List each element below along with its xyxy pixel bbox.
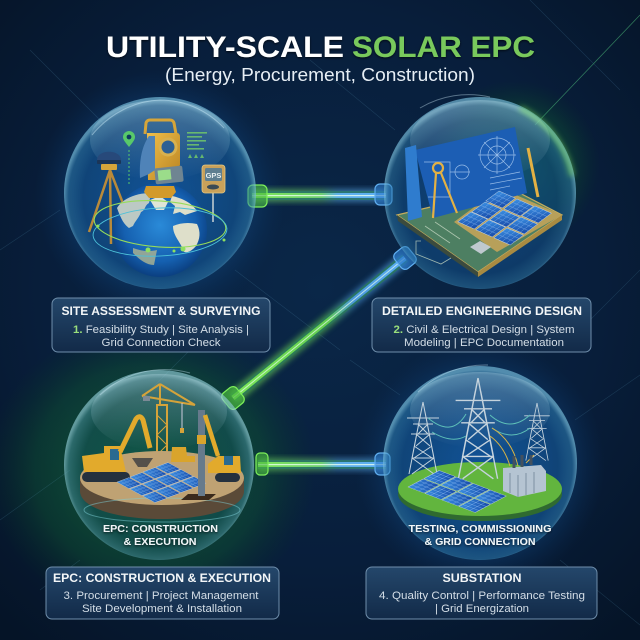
panel: step 2 label: 2. Civil & Electrical Design | System (394, 324, 574, 336)
connector: step 1 to step 2 (248, 184, 392, 207)
panel: step 3 label: EPC: CONSTRUCTION & EXECUTION (53, 571, 271, 585)
icon: pylons and wires (407, 378, 550, 479)
panel: step 2 bubble (384, 95, 576, 289)
connector: step 2 to step 3 (220, 245, 418, 411)
icon: location pin (123, 131, 135, 185)
icon: transformer module (470, 241, 491, 254)
panel: step 1 label: Grid Connection Check (102, 337, 221, 349)
icon: right excavator (205, 415, 241, 482)
panel: step 4 bubble (383, 365, 577, 560)
panel: step 4 label: | Grid Energization (435, 603, 529, 615)
panel: step 2 label (372, 298, 591, 352)
icon: orbit rings (92, 196, 228, 259)
icon: globe (113, 183, 207, 277)
panel: step 3 bubble (64, 370, 254, 560)
panel: step 4 label: SUBSTATION (442, 571, 522, 585)
icon: pencil (528, 148, 538, 197)
panel: step 3 label (46, 567, 279, 619)
icon: engineering board (397, 188, 562, 272)
connector: step 3 to step 4 (256, 453, 390, 475)
panel: step 1 label: 1. Feasibility Study | Site Analysis | (73, 324, 249, 336)
icon: GPS unit: GPS (206, 171, 221, 180)
panel: step 4 label (366, 567, 597, 619)
icon: solar panel array (458, 191, 551, 245)
icon: tripod receiver (89, 152, 131, 244)
panel: step 4 label: 4. Quality Control | Performance Testing (379, 590, 585, 602)
bubble label: & GRID CONNECTION (424, 536, 536, 548)
bubble label (103, 523, 218, 548)
bubble label: & EXECUTION (124, 536, 196, 548)
title: UTILITY-SCALE (106, 31, 344, 64)
icon: solar panels (117, 463, 206, 503)
icon: left excavator (82, 417, 153, 482)
icon: solar array (408, 470, 506, 513)
panel: step 2 label: Modeling | EPC Documentation (404, 337, 564, 349)
icon: tower crane (142, 384, 195, 463)
icon: blueprint sheet (405, 127, 527, 221)
icon: grassy island (398, 462, 562, 521)
icon: circuit lines (416, 222, 460, 264)
panel: step 1 label (52, 298, 270, 352)
panel: step 1 bubble (64, 97, 256, 289)
panel: step 2 label: DETAILED ENGINEERING DESIGN (382, 304, 582, 318)
bubble label: EPC: CONSTRUCTION (103, 523, 218, 535)
icon: circular site platform (80, 451, 244, 522)
panel: step 1 label: SITE ASSESSMENT & SURVEYING (62, 304, 260, 318)
icon: drafting compass (433, 163, 457, 218)
bubble label (408, 523, 552, 548)
bubble label: TESTING, COMMISSIONING (408, 523, 552, 535)
icon: pile driver (181, 410, 216, 500)
panel: step 3 label: 3. Procurement | Project Management (64, 590, 258, 602)
title (106, 31, 535, 64)
title: SOLAR EPC (352, 31, 535, 64)
icon: small excavator (171, 447, 195, 462)
subtitle: (Energy, Procurement, Construction) (165, 65, 475, 85)
icon: GPS unit (202, 165, 225, 222)
icon: total station (140, 120, 184, 198)
icon: transformer (503, 455, 546, 497)
panel: step 3 label: Site Development & Installation (82, 603, 242, 615)
icon: data readout (187, 132, 207, 158)
